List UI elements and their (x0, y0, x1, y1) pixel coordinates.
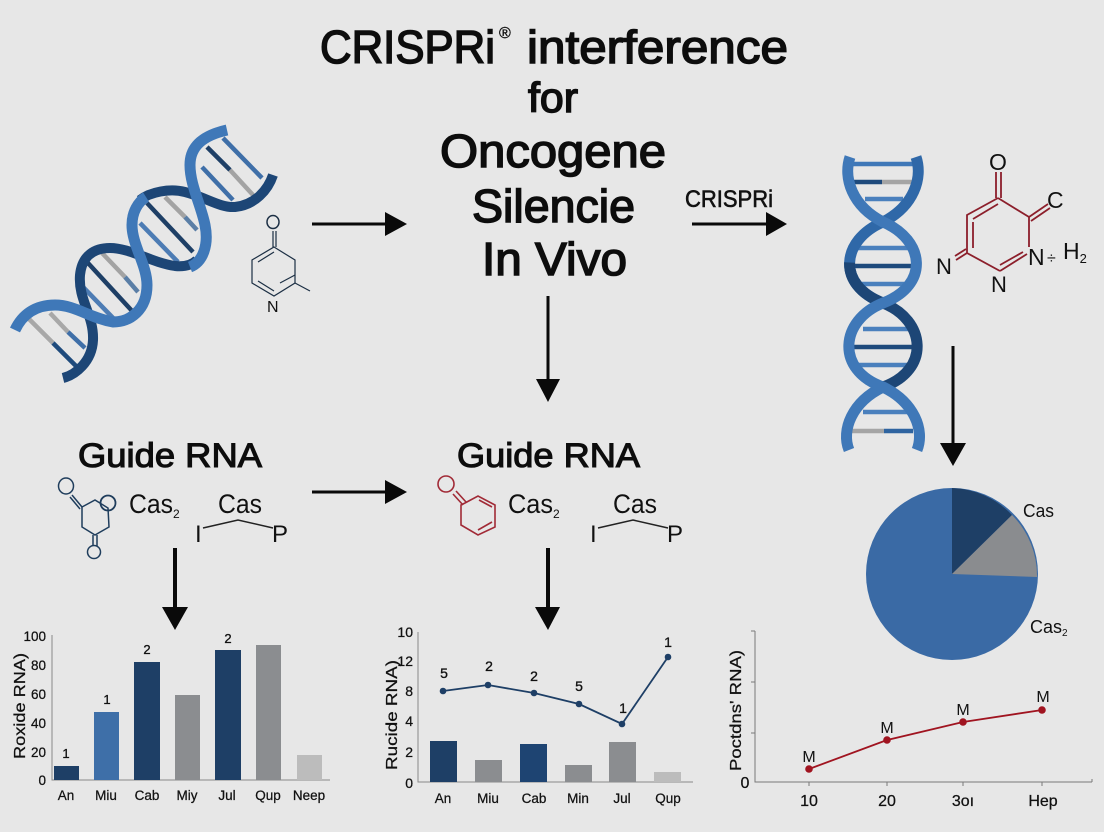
combo chart: 5 (440, 665, 448, 681)
icon: molecule red with labels: I (590, 521, 597, 548)
icon: molecule red with labels: P (667, 521, 683, 548)
bar chart: 40 (31, 716, 46, 731)
line chart red: 0 (741, 775, 750, 792)
icon: red molecule: ÷ (1047, 250, 1056, 267)
pie chart: Cas (1023, 501, 1054, 521)
combo chart: 12 (397, 653, 413, 669)
bar chart: 100 (23, 629, 46, 644)
title: In Vivo (482, 233, 627, 285)
line chart red: 10 (800, 793, 818, 810)
icon: DNA helix diagonal (15, 130, 273, 378)
line chart red: Hep (1028, 793, 1058, 810)
bar chart: 60 (31, 687, 46, 702)
line chart red: M (1036, 689, 1050, 706)
arrow: guide RNA to guide RNA (312, 480, 407, 504)
bar chart: 0 (38, 773, 46, 788)
combo chart (384, 624, 693, 806)
pie chart (866, 488, 1068, 660)
bar chart: 2 (143, 642, 151, 657)
line chart red: M (880, 720, 894, 737)
combo chart: 2 (485, 658, 493, 674)
combo chart: 1 (619, 700, 627, 716)
combo chart: Rucide RNA) (384, 660, 401, 770)
icon: red molecule: H (1063, 238, 1080, 264)
heading: Guide RNA left: Guide RNA (78, 437, 262, 475)
icon: DNA helix vertical (846, 157, 920, 450)
icon: molecule red with labels: Cas (613, 489, 657, 519)
bar chart (12, 629, 330, 803)
combo chart: 2 (405, 744, 413, 760)
icon: red molecule: N (991, 272, 1007, 297)
line chart red: 3oı (952, 793, 974, 810)
title: Oncogene (440, 125, 666, 177)
icon: red molecule: N (936, 254, 952, 279)
arrow: guide RNA to combo chart (535, 548, 560, 630)
combo chart: Cab (522, 791, 546, 806)
pie chart: 2 (1062, 628, 1068, 639)
combo chart: Qup (655, 791, 681, 806)
icon: red molecule (936, 149, 1087, 297)
icon: molecule navy with labels: 2 (173, 507, 180, 521)
title: for (528, 74, 578, 121)
label: CRISPRi: CRISPRi (685, 186, 773, 213)
combo chart: 0 (405, 775, 413, 791)
combo chart: 10 (397, 624, 413, 640)
combo chart: 8 (405, 683, 413, 699)
line chart red: M (956, 702, 970, 719)
line chart red (728, 631, 1092, 810)
icon: small molecule navy (252, 216, 310, 316)
icon: red molecule: C (1047, 187, 1064, 213)
icon: molecule navy with labels: Cas (129, 489, 173, 519)
combo chart: 2 (530, 668, 538, 684)
icon: molecule red with labels (438, 476, 683, 548)
combo chart: 5 (575, 678, 583, 694)
combo chart: Min (567, 791, 589, 806)
pie chart: Cas (1030, 617, 1062, 637)
bar chart: 1 (103, 692, 111, 707)
bar chart: Cab (135, 788, 159, 803)
bar chart: Miu (95, 788, 117, 803)
combo chart: 4 (405, 713, 413, 729)
combo chart: 1 (664, 634, 672, 650)
line chart red: 20 (878, 793, 896, 810)
icon: red molecule: N (1028, 244, 1045, 270)
icon: small molecule navy: N (267, 299, 279, 316)
bar chart: 2 (224, 631, 232, 646)
bar chart: 80 (31, 658, 46, 673)
bar chart: Neep (293, 788, 325, 803)
icon: molecule red with labels: Cas (508, 489, 553, 519)
title: ® (499, 25, 511, 42)
icon: molecule red with labels: 2 (553, 507, 560, 521)
bar chart: 1 (62, 746, 70, 761)
combo chart: An (435, 791, 451, 806)
icon: red molecule: 2 (1080, 251, 1087, 266)
arrow: title to guide RNA (536, 296, 560, 402)
title (320, 21, 788, 285)
combo chart: Jul (613, 791, 631, 806)
icon: red molecule: O (989, 149, 1007, 175)
bar chart: Jul (218, 788, 236, 803)
icon: molecule navy with labels: Cas (218, 489, 262, 519)
arrow: DNA to title (312, 212, 407, 236)
arrow: right DNA to pie (940, 346, 966, 466)
heading: Guide RNA middle: Guide RNA (457, 437, 640, 475)
icon: molecule navy with labels (58, 478, 288, 558)
title: CRISPRi (320, 21, 495, 73)
bar chart: An (58, 788, 74, 803)
bar chart: 20 (31, 745, 46, 760)
icon: molecule navy with labels: I (195, 521, 202, 548)
bar chart: Roxide RNA) (12, 653, 29, 759)
arrow: title to right DNA (692, 212, 787, 236)
bar chart: Qup (255, 788, 281, 803)
combo chart: Miu (477, 791, 499, 806)
line chart red: Poctdns' RNA) (728, 650, 745, 771)
title: interference (527, 21, 788, 73)
arrow: guide RNA to bar chart (162, 548, 188, 630)
line chart red: M (802, 749, 816, 766)
icon: molecule navy with labels: P (272, 521, 288, 548)
title: Silencie (472, 180, 635, 232)
bar chart: Miy (176, 788, 198, 803)
